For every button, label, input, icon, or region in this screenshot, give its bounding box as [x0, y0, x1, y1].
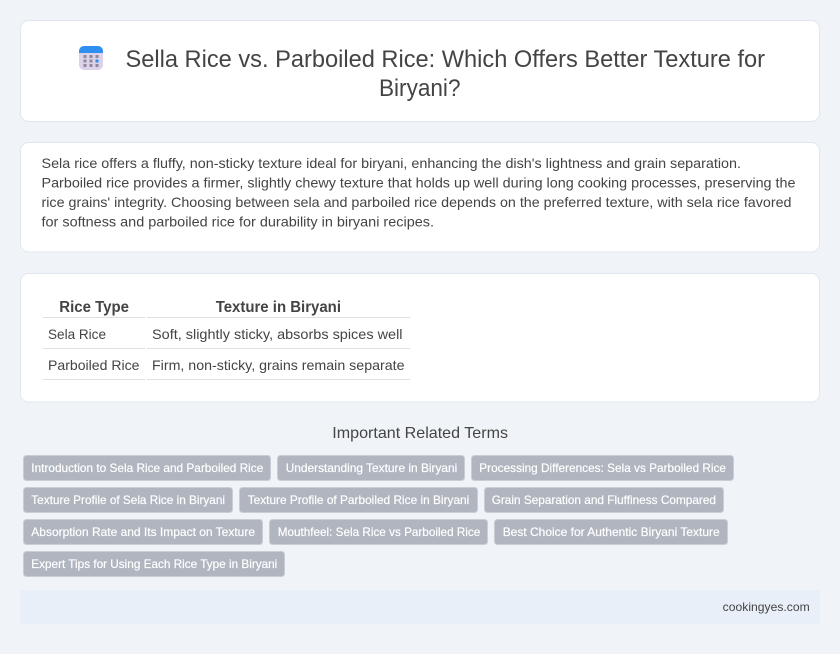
chip — [494, 520, 728, 544]
chip: Mouthfeel: Sela Rice vs Parboiled Rice — [278, 525, 481, 539]
chip: Best Choice for Authentic Biryani Texture — [503, 525, 720, 539]
chip: Texture Profile of Parboiled Rice in Biryani — [248, 493, 469, 507]
chip — [24, 520, 262, 544]
row: parboiled rice: Firm, non-sticky, grains remain separate — [152, 357, 405, 373]
description text: rice grains' integrity. Choosing between sela and parboiled rice depends on the preferred texture, with sela rice favored — [42, 194, 792, 210]
description text: Parboiled rice provides a firmer, slightly chewy texture that holds up well during long cooking processes, preserving the — [42, 174, 796, 190]
chip — [278, 456, 464, 480]
title — [126, 46, 765, 102]
chip: Introduction to Sela Rice and Parboiled Rice — [31, 461, 264, 475]
chip — [24, 456, 270, 480]
chip: Processing Differences: Sela vs Parboiled Rice — [479, 461, 726, 475]
description text: for softness and parboiled rice for durability in biryani recipes. — [42, 214, 434, 230]
row: sela rice — [48, 326, 402, 342]
description text: Sela rice offers a fluffy, non-sticky texture ideal for biryani, enhancing the dish's lightness and grain separation. — [42, 155, 741, 171]
chip: Absorption Rate and Its Impact on Texture — [31, 525, 255, 539]
chip — [270, 520, 488, 544]
chip — [24, 488, 232, 512]
heading: important related terms: Important Related Terms — [332, 425, 508, 442]
chip: Understanding Texture in Biryani — [286, 461, 457, 475]
footer — [20, 590, 820, 624]
title: Biryani? — [379, 75, 460, 102]
chip — [24, 552, 284, 576]
row: sela rice: Soft, slightly sticky, absorbs spices well — [152, 326, 402, 342]
table header: Texture in Biryani — [216, 299, 341, 316]
row: parboiled rice: Parboiled Rice — [48, 357, 140, 373]
footer source: cookingyes.com — [723, 600, 810, 614]
row: sela rice: Sela Rice — [48, 326, 106, 342]
panel: comparison table card — [20, 274, 820, 402]
row: parboiled rice — [48, 357, 405, 373]
chip: Texture Profile of Sela Rice in Biryani — [31, 493, 225, 507]
chip — [472, 456, 734, 480]
chip: Expert Tips for Using Each Rice Type in Biryani — [31, 557, 277, 571]
chip — [240, 488, 478, 512]
icon: calendar — [79, 46, 103, 70]
chip: Grain Separation and Fluffiness Compared — [492, 493, 716, 507]
table header — [59, 299, 341, 316]
description text — [42, 155, 796, 230]
title: Sella Rice vs. Parboiled Rice: Which Offers Better Texture for — [126, 46, 765, 73]
table header: Rice Type — [59, 299, 129, 316]
panel: description card — [20, 142, 820, 252]
table — [43, 299, 410, 380]
chip — [484, 488, 724, 512]
related terms chips — [24, 456, 734, 576]
panel: title card — [20, 20, 820, 122]
